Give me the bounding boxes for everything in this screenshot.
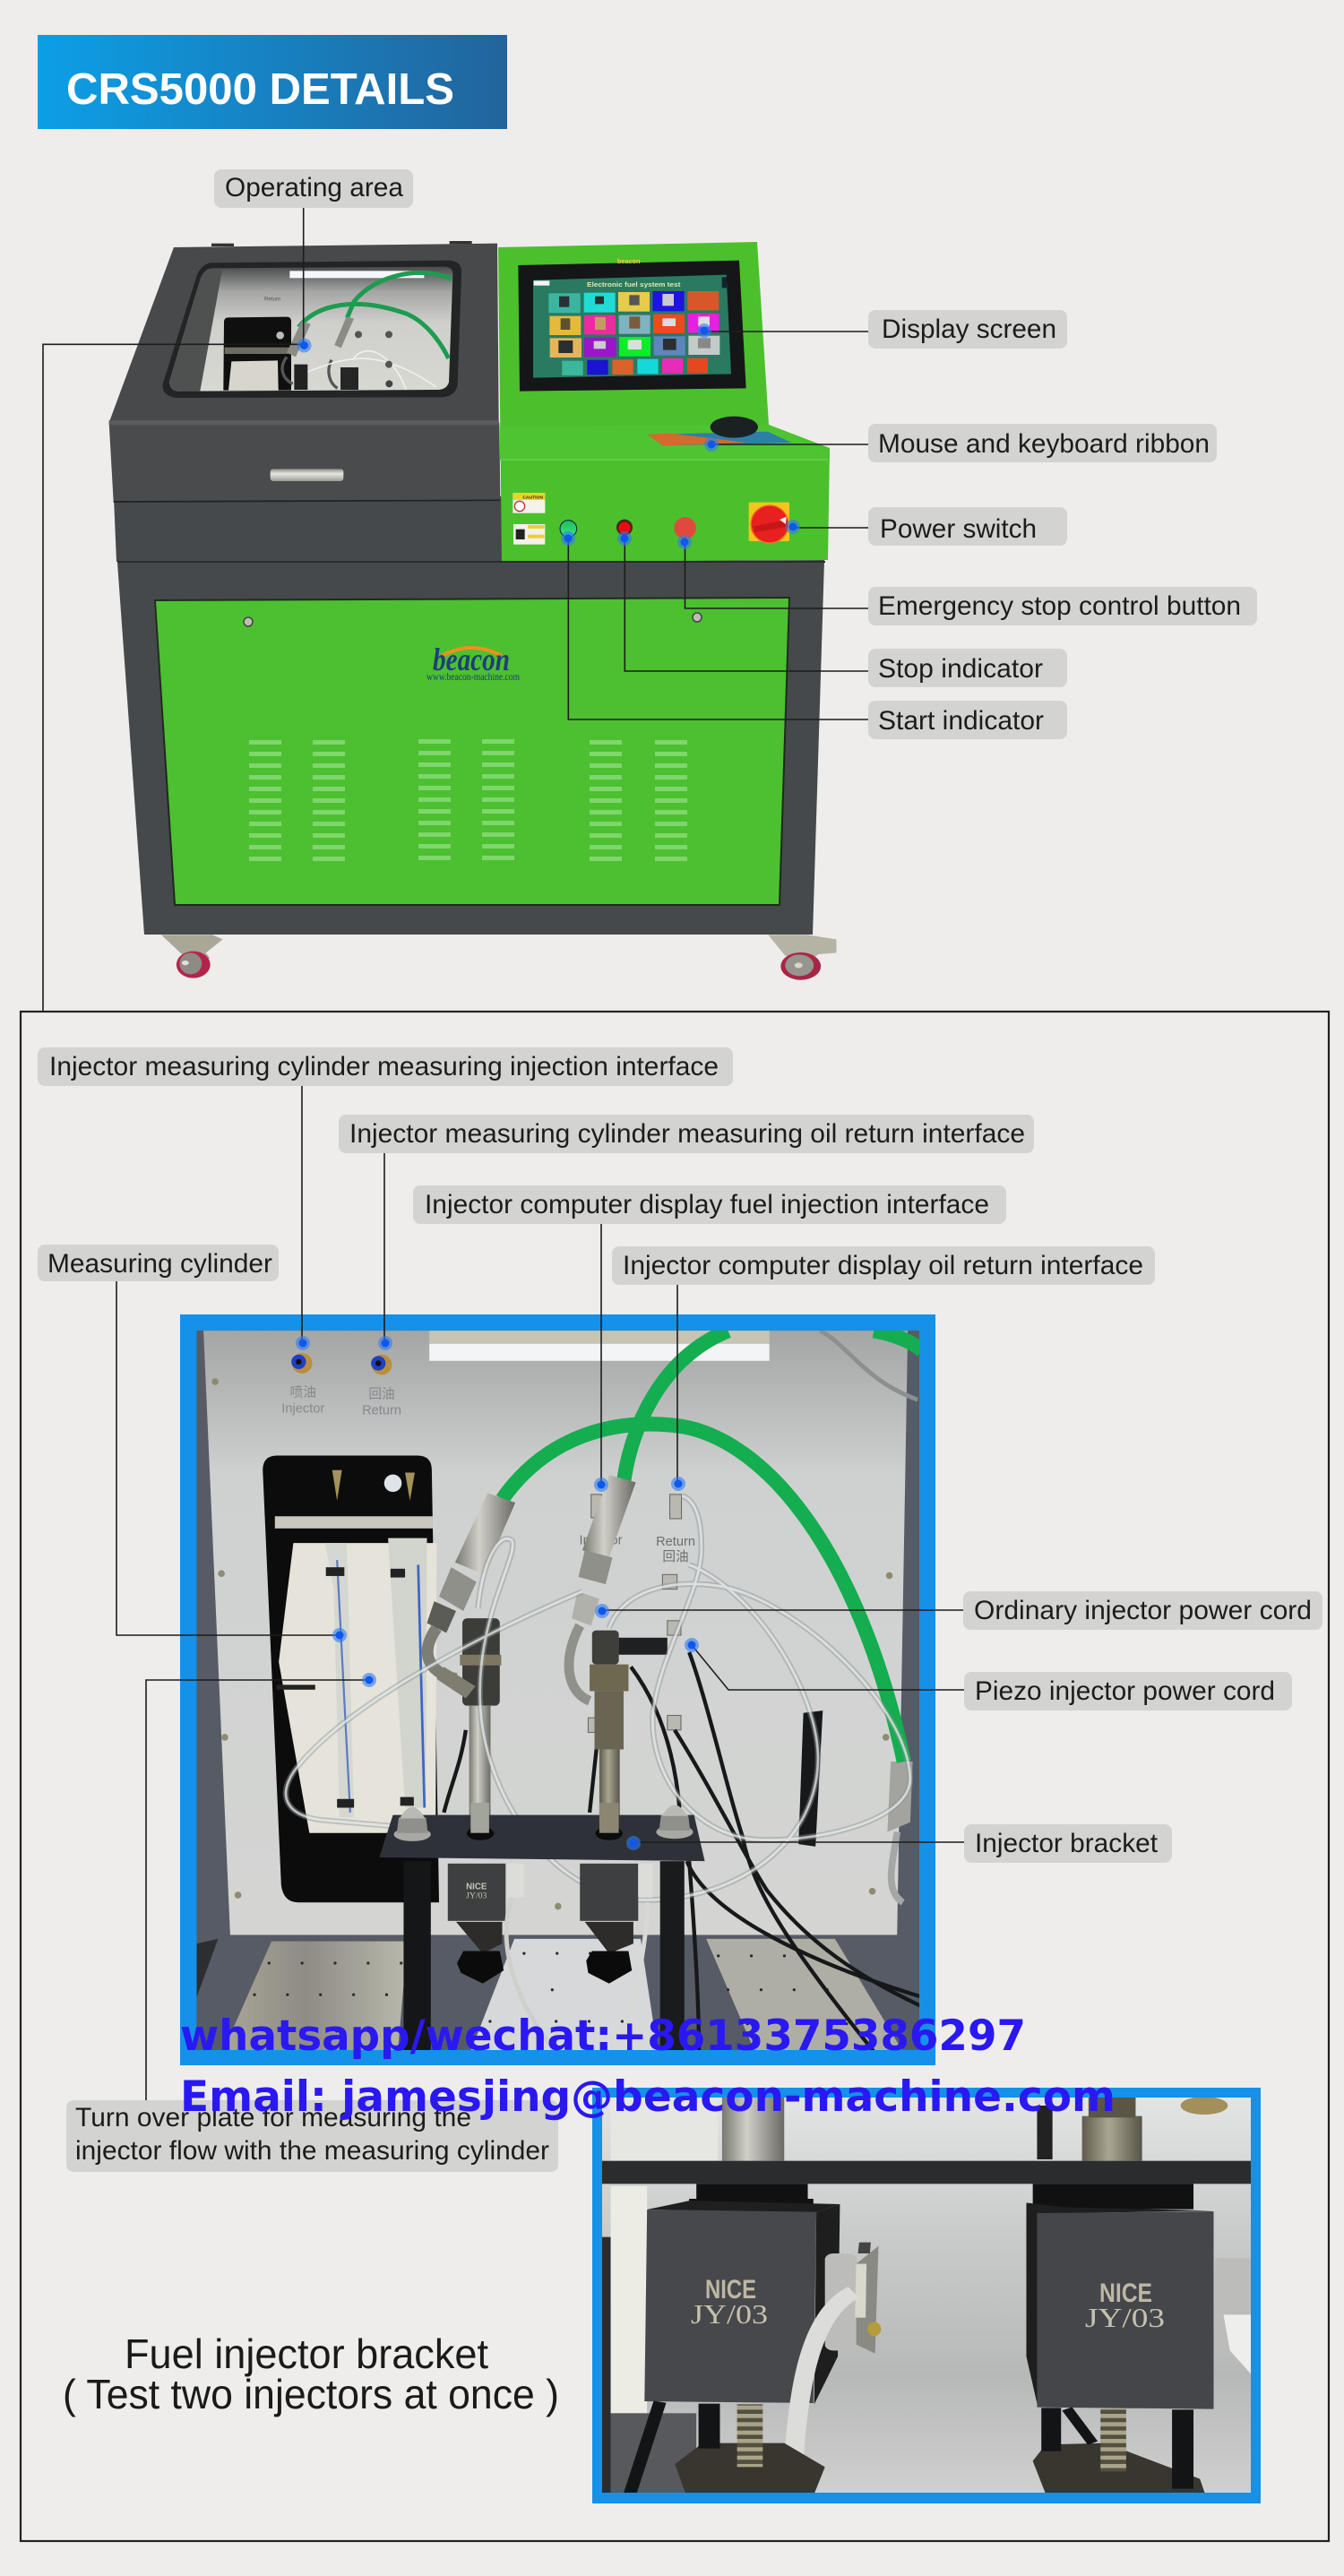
callout: piezo injector power cord bbox=[685, 1638, 1292, 1710]
title banner: CRS5000 DETAILS bbox=[66, 65, 454, 114]
lower left strip bbox=[114, 496, 504, 562]
start button bbox=[560, 521, 577, 537]
injector bracket plate bbox=[379, 1803, 705, 1861]
callout: piezo injector power cord: Piezo injector power cord bbox=[975, 1676, 1275, 1706]
caution stickers bbox=[513, 493, 545, 545]
callout: mouse and keyboard ribbon: Mouse and keyboard ribbon bbox=[878, 429, 1210, 459]
right injector and hose fitting bbox=[569, 1475, 668, 1841]
callout: operating area: Operating area bbox=[225, 173, 403, 202]
back panel and floor bbox=[197, 1327, 920, 2055]
callout: measuring cylinder: Measuring cylinder bbox=[47, 1249, 272, 1279]
top port fittings and labels: Injector bbox=[281, 1401, 324, 1416]
top port fittings and labels: Return bbox=[362, 1403, 401, 1417]
callout: measuring oil return interface bbox=[339, 1115, 1034, 1350]
green control panel bbox=[498, 242, 830, 562]
top port fittings and labels: Injector bbox=[580, 1534, 623, 1548]
callout: measuring oil return interface: Injector measuring cylinder measuring oil return interface bbox=[349, 1119, 1025, 1149]
display screen: beacon bbox=[617, 257, 641, 265]
left connector bbox=[825, 2243, 881, 2354]
beacon door logo: beacon bbox=[433, 642, 510, 677]
top port fittings and labels bbox=[281, 1353, 695, 1564]
callout: injector bracket: Injector bracket bbox=[975, 1829, 1159, 1858]
leader line: injector bracket bbox=[626, 1836, 964, 1850]
upper housing with window: Return bbox=[264, 297, 280, 303]
power switch bbox=[749, 503, 789, 543]
top port fittings and labels: 喷油 bbox=[290, 1384, 316, 1400]
emergency stop button bbox=[674, 517, 696, 539]
caution stickers: CAUTION bbox=[522, 495, 543, 501]
bracket plate bbox=[602, 2161, 1252, 2184]
callout: measuring cylinder bbox=[38, 1245, 347, 1642]
callout: turn over plate bbox=[66, 1673, 558, 2172]
callout: turn over plate: Turn over plate for measuring the bbox=[75, 2103, 471, 2132]
block engravings bbox=[691, 2275, 1165, 2333]
callout: measuring injection interface: Injector measuring cylinder measuring injection interface bbox=[49, 1052, 719, 1081]
mouse and keyboard ribbon bbox=[648, 417, 791, 445]
underside mounts bbox=[689, 2184, 1193, 2210]
callout: ordinary injector power cord: Ordinary injector power cord bbox=[974, 1596, 1312, 1625]
caption: fuel injector bracket: ( Test two injectors at once ) bbox=[63, 2371, 559, 2417]
support posts and flow blocks bbox=[403, 1861, 685, 2055]
callout: display fuel injection interface bbox=[413, 1185, 1006, 1492]
callout: stop indicator: Stop indicator bbox=[878, 654, 1043, 684]
stop indicator light bbox=[616, 520, 633, 536]
drawer handle bbox=[271, 469, 343, 481]
callout: display oil return interface bbox=[612, 1246, 1155, 1491]
panel: injector test detail frame bbox=[21, 1012, 1329, 2541]
block engravings: NICE bbox=[705, 2275, 756, 2305]
light strip bbox=[429, 1331, 770, 1361]
callout: display screen: Display screen bbox=[882, 314, 1056, 344]
upper housing with window bbox=[109, 241, 500, 502]
block engravings: JY/03 bbox=[691, 2298, 768, 2330]
top port fittings and labels: Return bbox=[656, 1535, 695, 1549]
callout: start indicator bbox=[561, 531, 1067, 739]
top port fittings and labels: 回油 bbox=[368, 1387, 395, 1402]
left block bbox=[644, 2201, 840, 2404]
callout: emergency stop control button bbox=[677, 535, 1257, 625]
beacon door logo: www.beacon-machine.com bbox=[426, 670, 521, 683]
black clip bbox=[798, 1710, 823, 1847]
display screen bbox=[518, 257, 746, 392]
callout: display screen bbox=[697, 310, 1067, 349]
right connector bbox=[1215, 2258, 1254, 2374]
panel screws bbox=[211, 1378, 892, 1909]
right side fittings bbox=[887, 1762, 913, 1902]
callout: start indicator: Start indicator bbox=[878, 706, 1044, 736]
main photo: test bench interior bbox=[180, 1314, 964, 2065]
title banner bbox=[38, 35, 507, 129]
door vents bbox=[265, 739, 671, 862]
machine illustration bbox=[109, 241, 837, 980]
green hoses bbox=[502, 1331, 922, 1762]
caption: fuel injector bracket bbox=[63, 2330, 559, 2417]
callout: emergency stop control button: Emergency stop control button bbox=[878, 591, 1241, 621]
watermark: whatsapp contact: whatsapp/wechat:+8613375386297 bbox=[180, 2012, 1026, 2061]
upper right cable bbox=[821, 1331, 918, 1400]
support posts and flow blocks: NICE bbox=[466, 1882, 487, 1892]
callout: turn over plate: injector flow with the measuring cylinder bbox=[75, 2136, 549, 2166]
caption: fuel injector bracket: Fuel injector bracket bbox=[125, 2330, 488, 2377]
callout: mouse and keyboard ribbon bbox=[704, 424, 1217, 462]
lower clamps and rods bbox=[630, 2402, 1205, 2494]
block engravings: NICE bbox=[1099, 2279, 1152, 2308]
backdrop bbox=[600, 2097, 1254, 2495]
right block bbox=[1026, 2202, 1213, 2409]
support posts and flow blocks: JY/03 bbox=[466, 1891, 487, 1900]
white cable bbox=[792, 2292, 854, 2494]
clear tubing bbox=[286, 1495, 910, 1900]
left caster bbox=[161, 935, 223, 978]
black cables bbox=[444, 1652, 922, 2052]
callout: measuring injection interface bbox=[38, 1047, 733, 1350]
callout: operating area bbox=[43, 169, 413, 1012]
window interior bbox=[169, 267, 452, 392]
left injector and hose fitting bbox=[426, 1493, 515, 1841]
block engravings: JY/03 bbox=[1085, 2302, 1165, 2333]
callout: display oil return interface: Injector computer display oil return interface bbox=[623, 1251, 1143, 1280]
measuring cylinder cutout bbox=[263, 1455, 439, 1902]
wall fittings bbox=[588, 1495, 682, 1732]
watermark: email contact: Email: jamesjing@beacon-machine.com bbox=[180, 2072, 1116, 2122]
callout: power switch bbox=[786, 507, 1067, 546]
right caster bbox=[768, 935, 837, 980]
callout: display fuel injection interface: Injector computer display fuel injection interface bbox=[425, 1190, 989, 1219]
upper posts bbox=[722, 2097, 1228, 2161]
secondary photo: injector bracket close-up bbox=[592, 2088, 1261, 2503]
callout: power switch: Power switch bbox=[880, 514, 1037, 544]
lower cabinet body bbox=[117, 560, 824, 935]
window frame bbox=[163, 261, 461, 398]
door screws bbox=[244, 613, 702, 626]
top port fittings and labels: 回油 bbox=[662, 1549, 689, 1564]
callout: injector bracket bbox=[964, 1824, 1172, 1863]
display screen: Electronic fuel system test bbox=[587, 280, 681, 289]
callout: ordinary injector power cord bbox=[595, 1591, 1322, 1630]
callout: stop indicator bbox=[617, 531, 1067, 687]
